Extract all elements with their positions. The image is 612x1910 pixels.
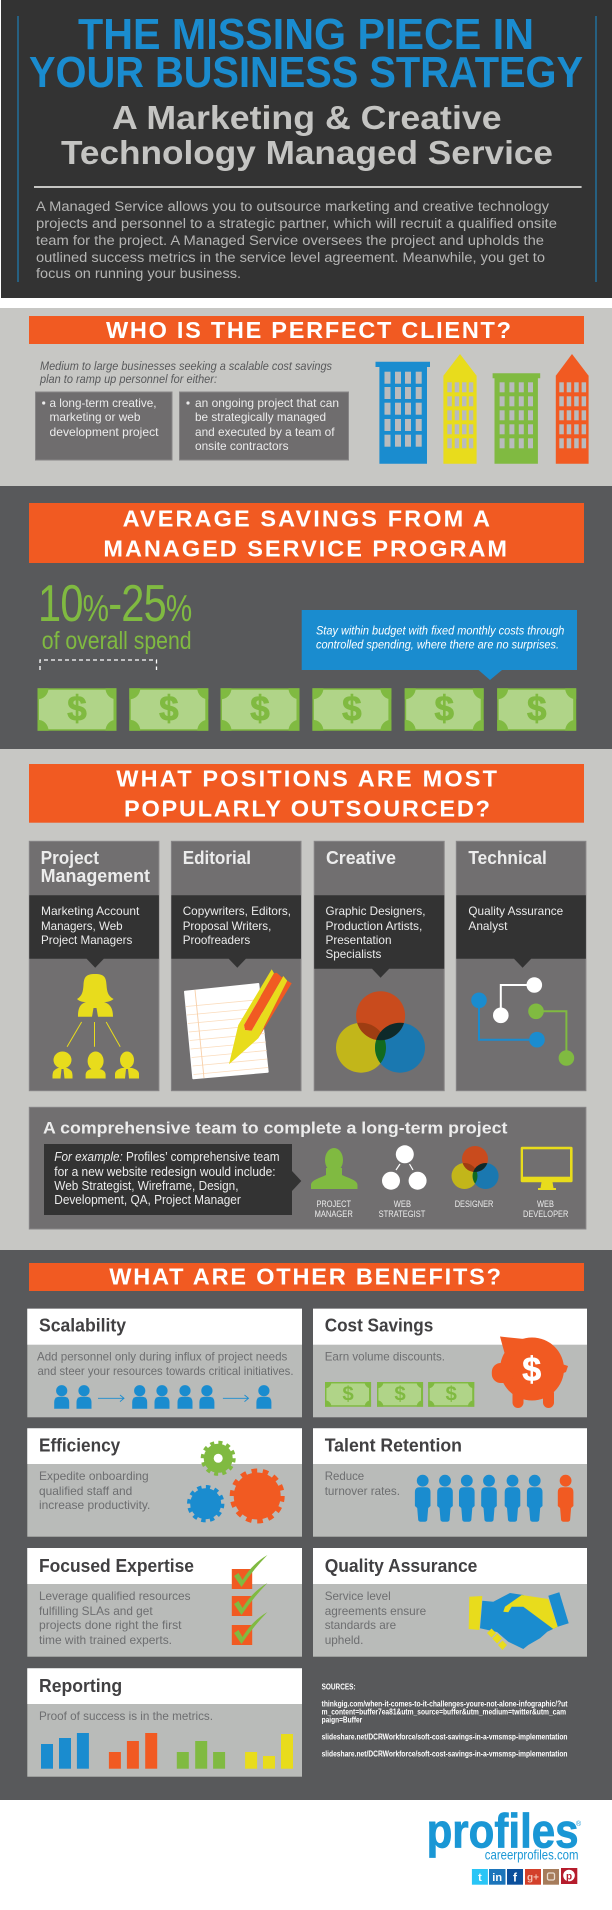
box: ongoing project: an ongoing project that can [195,396,339,410]
callout [302,610,577,680]
icon: dollar bills: $ [434,689,454,728]
sources: SOURCES: [322,1682,356,1692]
card: technical [456,841,586,1091]
box: long-term project: a long-term creative, [50,396,156,410]
card: talent retention: turnover rates. [325,1484,400,1498]
intro text: A Managed Service allows you to outsource marketing and creative technology [36,199,549,214]
intro italic text: Medium to large businesses seeking a scalable cost savings [40,359,332,373]
icon: piggy bank [492,1336,568,1408]
sources [322,1682,568,1759]
card: quality assurance: Service level [325,1589,391,1603]
icon: scaling people [54,1385,271,1409]
icon: dollar bills: $ [159,689,179,728]
card: creative: Production Artists, [326,919,422,933]
icon: small dollar bills: $ [446,1384,458,1406]
icon: web strategist: WEB [394,1199,411,1210]
heading bar: WHAT POSITIONS ARE MOST [116,766,498,792]
icon: venn circles [336,991,425,1073]
card: scalability: and steer your resources towards critical initiatives. [38,1364,294,1378]
example callout: Development, QA, Project Manager [54,1193,241,1207]
heading bar [29,503,584,563]
card: quality assurance: agreements ensure [325,1604,427,1618]
heading bar: AVERAGE SAVINGS FROM A [123,505,490,531]
card: scalability: Add personnel only during influx of project needs [37,1350,287,1364]
logo: careerprofiles.com [485,1846,578,1862]
heading bar [29,764,584,823]
card: scalability [27,1309,302,1417]
icon: small dollar bills: $ [394,1384,406,1406]
intro text: focus on running your business. [36,266,241,281]
intro text: projects and personnel to a strategic partner, which will recruit a qualified onsite [36,216,557,231]
icon: project manager [311,1148,358,1220]
card: editorial: Copywriters, Editors, [183,904,291,918]
title [29,11,583,97]
card: focused expertise [27,1548,302,1657]
icon: network nodes [471,977,574,1066]
card: reporting: Reporting [39,1676,122,1696]
social icons: t [478,1872,482,1884]
card: quality assurance [313,1548,587,1657]
icon: yellow building [443,354,477,464]
card: reporting: Proof of success is in the metrics. [39,1709,213,1723]
logo: ® [576,1820,582,1828]
icon: notepad and pencil [185,969,292,1078]
card: focused expertise: projects done right the first [39,1618,182,1632]
savings figure: 10%-25% [38,574,192,632]
icon: project manager: PROJECT [316,1199,351,1210]
card: editorial: Proposal Writers, [183,919,271,933]
icon: web developer [521,1147,573,1220]
social icons [472,1868,577,1885]
card: project management: Management [41,866,150,886]
heading bar: POPULARLY OUTSOURCED? [124,796,490,822]
card: focused expertise: Focused Expertise [39,1556,194,1576]
icon: retained staff [415,1475,573,1522]
card: editorial: Proofreaders [183,933,250,947]
icon: web strategist: STRATEGIST [379,1209,426,1220]
intro text: team for the project. A Managed Service oversees the project and upholds the [36,233,544,248]
intro italic text: plan to ramp up personnel for either: [39,372,217,386]
callout: controlled spending, where there are no surprises. [316,640,559,652]
icon: web developer: WEB [537,1199,554,1210]
heading bar [29,1263,584,1291]
icon: blue building [376,362,430,464]
card: creative: Creative [326,848,396,868]
card: creative [314,841,444,1091]
card: project management [29,841,159,1091]
subtitle: A Marketing & Creative [112,100,502,137]
card: efficiency: Efficiency [39,1436,120,1456]
card: quality assurance: Quality Assurance [325,1556,477,1576]
box: long-term project: marketing or web [50,410,141,424]
icon: dollar bills: $ [67,689,87,728]
panel: comprehensive team: A comprehensive team to complete a long-term project [43,1118,508,1137]
social icons: f [513,1870,518,1884]
intro text [36,199,557,281]
example callout: Web Strategist, Wireframe, Design, [54,1179,238,1193]
icon: checkmarks [232,1555,267,1645]
icon: web strategist [379,1145,427,1220]
card: talent retention: Reduce [325,1469,364,1483]
panel: footer [0,1800,612,1910]
icon: dollar bills: $ [250,689,270,728]
box: long-term project: development project [50,425,159,439]
panel: other benefits [0,1250,612,1800]
card: project management: Project [41,848,99,868]
card: creative: Specialists [326,947,381,961]
box: ongoing project: onsite contractors [195,439,288,453]
icon: web developer: DEVELOPER [523,1209,568,1220]
box: long-term project [36,392,172,460]
icon: designer [452,1146,499,1210]
icon: dollar bills [38,688,576,731]
title: THE MISSING PIECE IN [78,11,534,59]
icon: team hierarchy [52,974,139,1078]
card: efficiency [27,1428,302,1537]
box: ongoing project [180,392,348,460]
savings figure: of overall spend [42,627,192,655]
card: focused expertise: Leverage qualified resources [39,1589,190,1603]
card: quality assurance: upheld. [325,1633,363,1647]
panel: header [1,0,612,298]
panel: perfect client [0,308,612,486]
heading bar: WHAT ARE OTHER BENEFITS? [109,1263,501,1289]
icon: designer: DESIGNER [455,1199,494,1210]
icon: dollar bills: $ [342,689,362,728]
card: scalability: Scalability [39,1316,126,1336]
card: talent retention [313,1428,587,1537]
card: efficiency: Expedite onboarding [39,1469,149,1483]
card: talent retention: Talent Retention [325,1436,462,1456]
card: editorial [171,841,301,1091]
social icons: p [566,1872,572,1882]
heading bar: MANAGED SERVICE PROGRAM [103,535,507,561]
card: creative: Presentation [326,933,392,947]
icon: green building [493,373,540,464]
card: project management: Project Managers [41,933,132,947]
icon: small dollar bills [325,1382,474,1407]
heading bar [29,316,584,344]
card: focused expertise: fulfilling SLAs and get [39,1604,153,1618]
card: technical: Quality Assurance [468,904,564,918]
card: technical: Technical [468,848,547,868]
card: cost savings: Cost Savings [325,1316,433,1336]
panel: average savings [0,486,612,749]
card: quality assurance: standards are [325,1618,397,1632]
box: ongoing project: and executed by a team of [195,425,335,439]
panel: comprehensive team [29,1107,586,1229]
icon: project manager: MANAGER [315,1209,353,1220]
card: efficiency: qualified staff and [39,1484,132,1498]
icon: piggy bank: $ [522,1351,541,1389]
card: focused expertise: time with trained experts. [39,1633,172,1647]
bar chart [41,1733,293,1769]
card: project management: Marketing Account [41,904,140,918]
card: creative: Graphic Designers, [326,904,426,918]
logo: profiles [427,1805,579,1858]
social icons: g+ [527,1872,539,1884]
callout: Stay within budget with fixed monthly costs through [316,626,564,638]
card: reporting [27,1668,302,1777]
icon: small dollar bills: $ [342,1384,354,1406]
card: project management: Managers, Web [41,919,123,933]
sources: paign=Buffer [322,1715,363,1725]
icon: orange building [556,354,589,464]
icon: gears [189,1443,282,1521]
subtitle: Technology Managed Service [61,135,553,172]
card: cost savings: Earn volume discounts. [325,1350,445,1364]
example callout [44,1144,301,1215]
intro text: outlined success metrics in the service level agreement. Meanwhile, you get to [36,250,545,265]
box: ongoing project: be strategically managed [195,410,326,424]
panel: outsourced positions [0,749,612,1250]
card: efficiency: increase productivity. [39,1498,150,1512]
icon: dollar bills: $ [527,689,546,728]
intro italic text [39,359,332,386]
card: technical: Analyst [468,919,508,933]
example callout: for a new website redesign would include: [54,1165,276,1179]
example callout: For example: Profiles’ comprehensive team [54,1150,279,1164]
card: cost savings [313,1309,587,1417]
social icons: in [492,1872,502,1884]
heading bar: WHO IS THE PERFECT CLIENT? [106,317,511,343]
subtitle [61,100,553,172]
icon: handshake [469,1592,569,1650]
dashed bracket [40,660,156,670]
card: editorial: Editorial [183,848,251,868]
